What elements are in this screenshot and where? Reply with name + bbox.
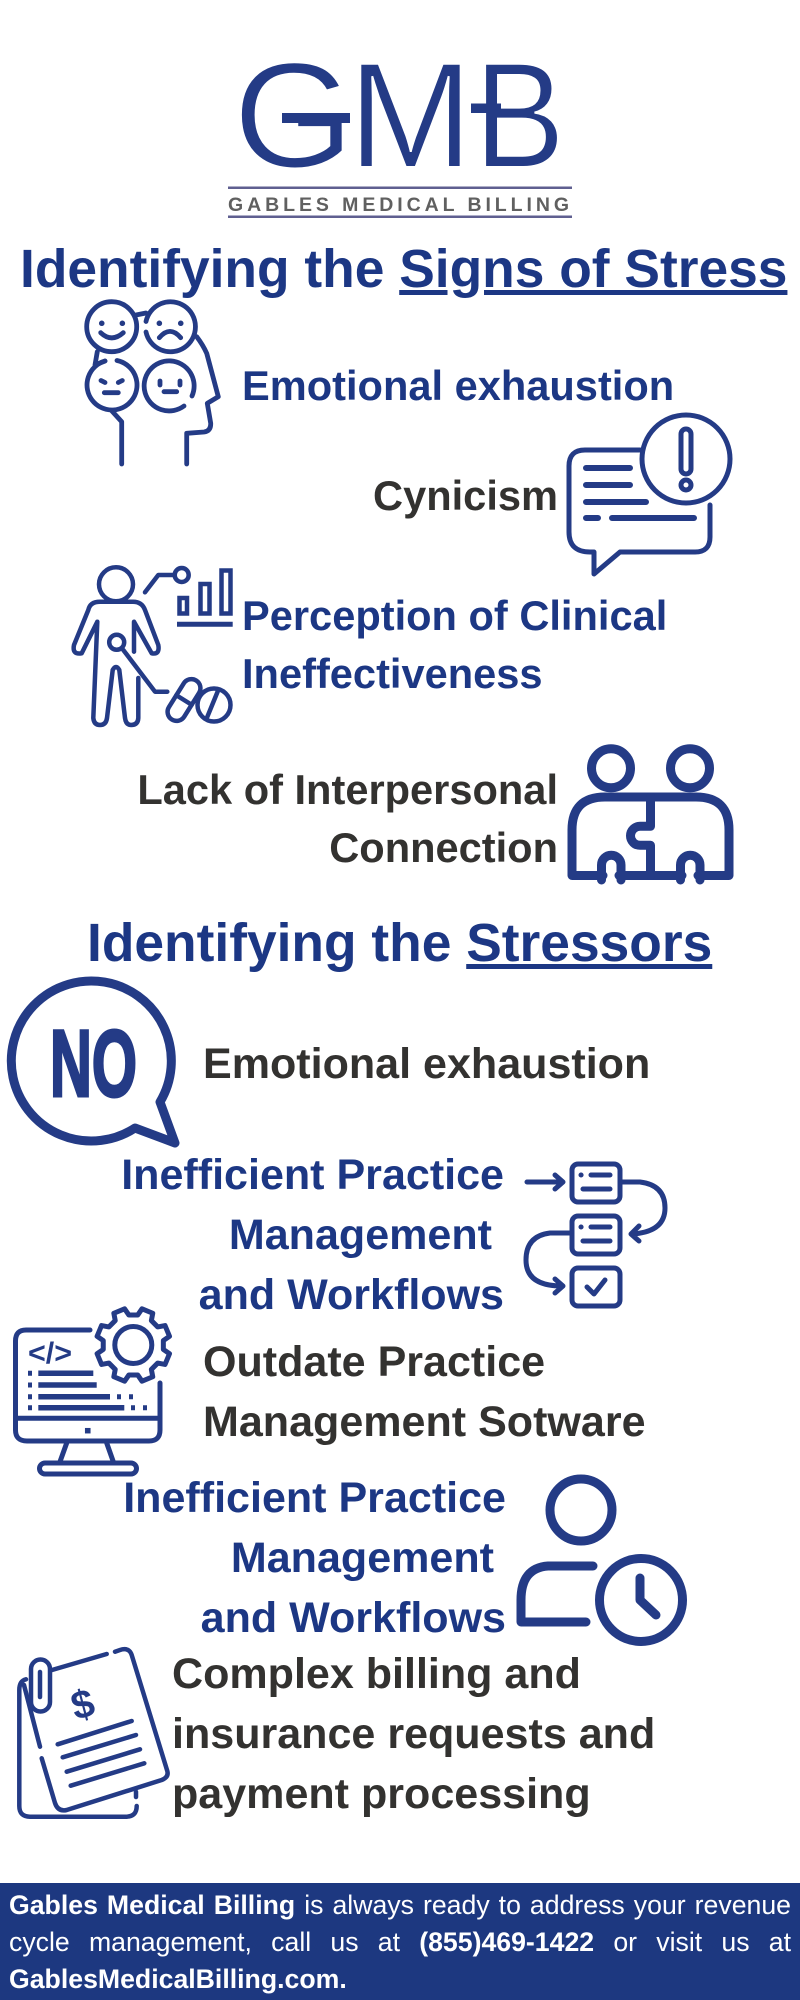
- logo: G: [233, 32, 354, 199]
- text: inefficient practice management and workflows: and Workflows: [201, 1594, 506, 1642]
- logo: M: [348, 31, 473, 199]
- text: inefficient practice management and workflows: and Workflows: [199, 1270, 504, 1318]
- text: emotional exhaustion: Emotional exhaustion: [242, 362, 674, 408]
- footer text: Gables Medical Billing is always ready to address your revenue cycle management, call us at (855)469-1422 or visit us at GablesMedicalBilling.com.: [9, 1890, 791, 1994]
- text: cynicism: Cynicism: [373, 472, 558, 519]
- text: perception of clinical ineffectiveness: [242, 592, 667, 696]
- text: complex billing and insurance: payment processing: [172, 1770, 591, 1818]
- icon: no speech bubble: NO: [50, 1011, 137, 1117]
- text: complex billing and insurance: [172, 1650, 655, 1818]
- heading: stressors: Identifying the Stressors: [87, 914, 712, 972]
- text: lack of interpersonal connection: Connection: [329, 824, 558, 871]
- text: lack of interpersonal connection: Lack of Interpersonal: [137, 766, 558, 813]
- icon: billing document: $: [66, 1681, 99, 1729]
- text: outdate practice management software: Management Sotware: [203, 1398, 646, 1446]
- icon: monitor and gear: </>: [28, 1337, 72, 1370]
- text: emotional exhaustion: Emotional exhaustion: [203, 1040, 650, 1088]
- logo: GABLES MEDICAL BILLING: [228, 194, 569, 216]
- text: inefficient practice management and workflows: [123, 1474, 506, 1642]
- text: inefficient practice management and workflows: Management: [229, 1210, 492, 1258]
- logo: [228, 31, 572, 218]
- logo: B: [474, 32, 565, 199]
- text: inefficient practice management and workflows: Inefficient Practice: [123, 1474, 506, 1522]
- text: complex billing and insurance: Complex billing and: [172, 1650, 581, 1698]
- text: outdate practice management software: Outdate Practice: [203, 1338, 545, 1386]
- text: inefficient practice management and workflows: [121, 1150, 504, 1318]
- footer: [0, 1883, 800, 2000]
- text: inefficient practice management and workflows: Management: [231, 1534, 494, 1582]
- text: lack of interpersonal connection: [137, 766, 558, 871]
- text: Ineffectiveness: [242, 650, 543, 696]
- text: inefficient practice management and workflows: Inefficient Practice: [121, 1150, 504, 1198]
- text: perception of clinical ineffectiveness: Perception of Clinical: [242, 592, 667, 638]
- heading: signs of stress: Identifying the Signs of Stress: [20, 240, 787, 299]
- text: outdate practice management software: [203, 1338, 646, 1446]
- text: complex billing and insurance: insurance requests and: [172, 1710, 655, 1758]
